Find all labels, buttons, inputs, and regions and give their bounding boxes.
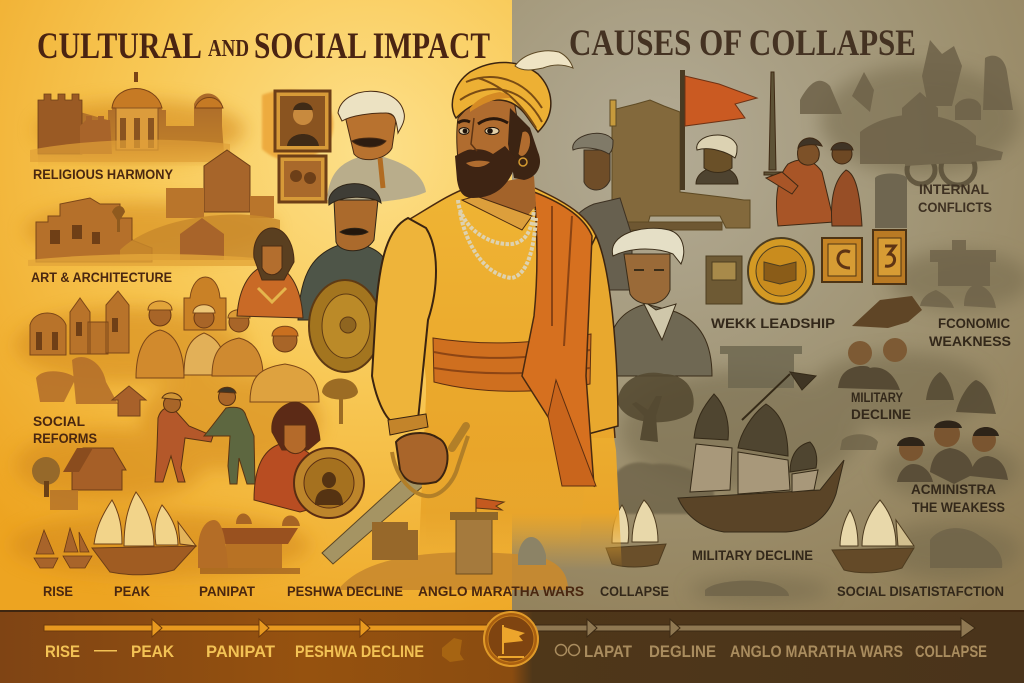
illustration: soldiers with sword: [764, 72, 862, 226]
illustration: woman with shield: [254, 402, 364, 518]
illustration: man in white turban on throne: [696, 135, 738, 184]
timeline labels right: LAPAT: [584, 642, 633, 661]
illustration: framed square glyphs: [822, 230, 906, 284]
label: social reforms: [33, 414, 97, 446]
illustration: villagers at work: [36, 357, 118, 404]
torso: [405, 188, 615, 548]
eyes and brows: [458, 119, 508, 124]
label: military decline right: DECLINE: [851, 407, 911, 422]
illustration: man in white turban: [327, 91, 426, 203]
illustration: cannon: [852, 296, 922, 328]
illustration: ground silhouettes: [705, 434, 1002, 596]
timeline labels right: [556, 642, 987, 661]
label: internal conflicts: [918, 181, 992, 215]
illustration: two men shaking hands: [155, 387, 255, 484]
labels: rise, peak, panipat: PANIPAT: [199, 584, 256, 599]
illustration: small ships: [34, 528, 92, 568]
background: left amber panel: [0, 0, 512, 612]
label: art and architecture: ART & ARCHITECTURE: [31, 270, 172, 285]
feather: [515, 51, 573, 70]
timeline arrow right: [535, 618, 975, 638]
title: cultural and social impact: SOCIAL IMPACT: [254, 26, 490, 67]
illustration: bare tree: [618, 373, 694, 442]
labels: peshwa decline, anglo maratha wars, collapse: COLLAPSE: [600, 584, 669, 599]
necklaces: [458, 200, 536, 278]
orange shoulder sash: [522, 192, 594, 486]
labels: rise, peak, panipat: [43, 584, 256, 599]
illustration: village house and tree: [32, 448, 126, 510]
timeline labels left: PANIPAT: [206, 642, 276, 661]
waist sash: [433, 334, 591, 391]
illustration: distant building and men: [920, 240, 996, 308]
label: economic weakness: [929, 316, 1011, 349]
illustration: shore huts and people: [198, 514, 300, 574]
illustration: small galleon: [606, 500, 666, 567]
illustration: round shield: [309, 280, 381, 372]
timeline labels right: DEGLINE: [649, 642, 716, 661]
illustration: throne: [610, 100, 750, 232]
timeline medallion with flag: [484, 612, 538, 666]
labels: peshwa decline, anglo maratha wars, collapse: [287, 584, 669, 599]
background: warm mist behind left scenes: [10, 100, 320, 577]
panel: cultural and social impact scenes: [28, 72, 426, 599]
illustration: central warrior king: [322, 51, 622, 570]
illustration: small hut: [112, 386, 146, 416]
illustration: ruined wall: [720, 346, 802, 388]
timeline labels right: ANGLO MARATHA WARS: [730, 642, 903, 661]
sword: [322, 448, 451, 564]
label: military decline right: MILITARY: [851, 390, 903, 405]
timeline labels right: COLLAPSE: [915, 642, 987, 661]
title: cultural and social impact: CULTURAL: [37, 26, 202, 67]
illustration: tree: [322, 378, 358, 424]
timeline labels left: [45, 642, 424, 661]
timeline band: [0, 610, 1024, 683]
illustration: hilltop fort and domed palace: [30, 72, 230, 166]
label: military decline center: MILITARY DECLINE: [692, 548, 813, 563]
label: internal conflicts: CONFLICTS: [918, 199, 992, 215]
labels: rise, peak, panipat: RISE: [43, 584, 73, 599]
illustration: two men, military decline: [838, 338, 907, 390]
label: economic weakness: FCONOMIC: [938, 316, 1010, 331]
illustration: crowd silhouettes: [608, 462, 714, 514]
illustration: silhouettes of battle and palace: [800, 40, 1013, 185]
label: administrative weakness: THE WEAKESS: [912, 500, 1005, 515]
hand on hilt: [396, 433, 448, 484]
illustration: book emblem: [706, 238, 814, 304]
background: dark mist behind right scenes: [620, 65, 1024, 604]
left arm: [372, 218, 436, 422]
illustration: cream sail ship: [832, 500, 914, 573]
timeline ornament: [442, 638, 464, 662]
illustration: orange banner on pole: [680, 70, 757, 190]
timeline labels left: PEAK: [131, 642, 175, 661]
labels: peshwa decline, anglo maratha wars, collapse: PESHWA DECLINE: [287, 584, 403, 599]
illustration: ruined pillar: [875, 174, 907, 228]
label: internal conflicts: INTERNAL: [919, 181, 989, 197]
right arm: [578, 236, 618, 434]
neck and collar: [478, 176, 536, 224]
panel: causes of collapse scenes: [558, 40, 1013, 599]
timeline arrow left: [44, 619, 489, 637]
illustration: man in white turban, front: [606, 228, 712, 376]
illustration: hill fort and towers: [28, 150, 280, 266]
title: cultural and social impact: AND: [208, 36, 249, 62]
label: religious harmony: RELIGIOUS HARMONY: [33, 167, 173, 182]
label: military decline right: [851, 390, 911, 422]
title: causes of collapse: CAUSES OF COLLAPSE: [569, 23, 916, 64]
title: cultural and social impact: [37, 26, 490, 67]
labels: rise, peak, panipat: PEAK: [114, 584, 150, 599]
illustration: woman with headscarf: [237, 228, 303, 318]
label: economic weakness: WEAKNESS: [929, 334, 1011, 349]
illustration: man in grey turban: [558, 133, 632, 290]
label: weak leadership: WEKK LEADSHIP: [711, 316, 835, 331]
illustration: group of townspeople: [136, 301, 319, 402]
label: administrative weakness: [911, 482, 1005, 515]
illustration: large sailing ship: [92, 492, 196, 575]
hair and ear: [508, 108, 540, 180]
label: social reforms: SOCIAL: [33, 414, 85, 429]
illustration: man with dark cap: [298, 184, 394, 320]
turban: [452, 62, 551, 132]
timeline labels left: RISE: [45, 642, 80, 661]
timeline labels left: PESHWA DECLINE: [295, 642, 424, 661]
illustration: large dark ship: [678, 372, 844, 532]
label: administrative weakness: ACMINISTRA: [911, 482, 996, 497]
background: right grey panel: [512, 0, 1024, 612]
illustration: temples: [30, 277, 226, 355]
shoulder outline: [405, 188, 615, 438]
illustration: coastal fort: [338, 498, 568, 590]
illustration: portrait frames: [262, 90, 333, 202]
illustration: soldiers silhouettes: [926, 372, 996, 414]
beard: [455, 146, 517, 198]
illustration: three men: [897, 420, 1008, 484]
lower robe: [418, 350, 622, 570]
label: social dissatisfaction: SOCIAL DISATISTAFCTION: [837, 584, 1004, 599]
head: [457, 96, 520, 191]
labels: peshwa decline, anglo maratha wars, collapse: ANGLO MARATHA WARS: [418, 584, 584, 599]
label: social reforms: REFORMS: [33, 431, 97, 446]
